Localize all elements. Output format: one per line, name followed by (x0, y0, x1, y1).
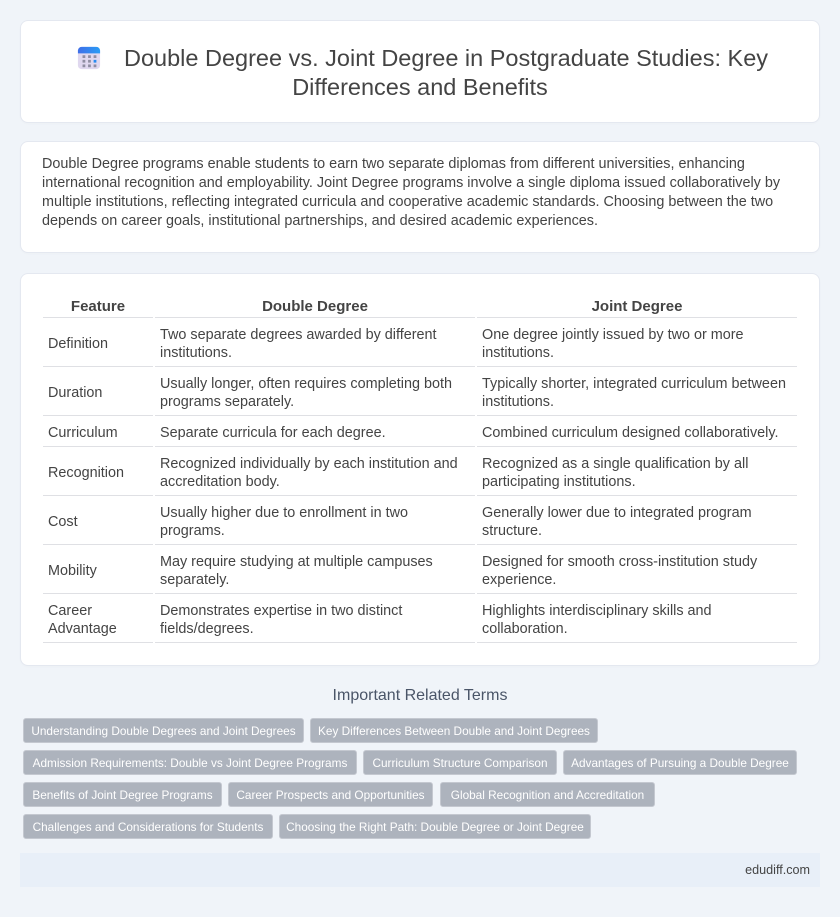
row: career advantage: fields/degrees. (160, 621, 254, 637)
tag (23, 782, 222, 807)
row: cost: programs. (160, 523, 225, 539)
title: Differences and Benefits (292, 74, 548, 100)
row: career advantage: Demonstrates expertise in two distinct (160, 603, 402, 619)
title: Double Degree vs. Joint Degree in Postgraduate Studies: Key (124, 45, 768, 71)
tag list (23, 718, 797, 839)
row: duration: Duration (48, 385, 102, 401)
tag: Career Prospects and Opportunities (236, 788, 425, 802)
tag (310, 718, 598, 743)
row: mobility: experience. (482, 572, 556, 588)
row: definition: Definition (48, 336, 108, 352)
tag (563, 750, 797, 775)
table header: Feature (71, 298, 125, 315)
row: curriculum (48, 425, 778, 441)
table header (71, 298, 682, 315)
tag: Key Differences Between Double and Joint Degrees (318, 724, 590, 738)
panel: comparison table (20, 273, 820, 666)
tag: Understanding Double Degrees and Joint Degrees (31, 724, 296, 738)
text block: introduction: Double Degree programs enable students to earn two separate diplomas from different universities, enhancing (42, 156, 745, 172)
footer (20, 853, 820, 887)
tag (440, 782, 655, 807)
row: curriculum: Combined curriculum designed collaboratively. (482, 425, 778, 441)
row: cost: Cost (48, 514, 78, 530)
row: curriculum: Separate curricula for each degree. (160, 425, 386, 441)
row: cost: structure. (482, 523, 542, 539)
row: duration: programs separately. (160, 394, 294, 410)
icon: calendar (78, 46, 100, 70)
tag: Curriculum Structure Comparison (372, 756, 548, 770)
row: cost (48, 505, 752, 539)
tag: Choosing the Right Path: Double Degree or Joint Degree (286, 820, 584, 834)
row: mobility: separately. (160, 572, 229, 588)
tag: Benefits of Joint Degree Programs (32, 788, 213, 802)
table header: Joint Degree (592, 298, 682, 315)
row: career advantage: collaboration. (482, 621, 568, 637)
tag (23, 814, 273, 839)
text block: introduction: depends on career goals, institutional partnerships, and desired academic experiences. (42, 213, 598, 229)
row: duration (48, 376, 786, 410)
row: duration: institutions. (482, 394, 554, 410)
text block: introduction: multiple institutions, reflecting integrated curricula and cooperative academic standards. Choosing between the two (42, 194, 773, 210)
row: recognition: participating institutions. (482, 474, 636, 490)
row: mobility: May require studying at multiple campuses (160, 554, 433, 570)
row: definition: institutions. (482, 345, 554, 361)
panel: introduction (20, 141, 820, 253)
row: career advantage: Advantage (48, 621, 117, 637)
row: curriculum: Curriculum (48, 425, 118, 441)
row: career advantage: Highlights interdisciplinary skills and (482, 603, 712, 619)
tag: Advantages of Pursuing a Double Degree (571, 756, 789, 770)
row: duration: Typically shorter, integrated curriculum between (482, 376, 786, 392)
tag: Admission Requirements: Double vs Joint Degree Programs (33, 756, 347, 770)
text block: introduction: international recognition and employability. Joint Degree programs involve a single diploma issued collaboratively by (42, 175, 780, 191)
row: definition: One degree jointly issued by two or more (482, 327, 744, 343)
row: definition: Two separate degrees awarded by different (160, 327, 437, 343)
row: definition (48, 327, 744, 361)
row: recognition: Recognized as a single qualification by all (482, 456, 748, 472)
tag (228, 782, 433, 807)
row: recognition: Recognized individually by each institution and (160, 456, 458, 472)
table header: Double Degree (262, 298, 368, 315)
row: mobility (48, 554, 758, 588)
row: cost: Usually higher due to enrollment in two (160, 505, 408, 521)
row: recognition: accreditation body. (160, 474, 280, 490)
row: duration: Usually longer, often requires completing both (160, 376, 452, 392)
tag: Global Recognition and Accreditation (451, 788, 644, 802)
row: mobility: Designed for smooth cross-institution study (482, 554, 757, 570)
tag (279, 814, 591, 839)
tag: Challenges and Considerations for Students (33, 820, 263, 834)
tag (23, 718, 304, 743)
text block: introduction (42, 156, 780, 229)
footer text: edudiff.com (745, 863, 810, 877)
panel: header (20, 20, 820, 123)
row: career advantage: Career (48, 603, 92, 619)
row: mobility: Mobility (48, 563, 97, 579)
row: recognition: Recognition (48, 465, 124, 481)
tag (363, 750, 557, 775)
row: recognition (48, 456, 748, 490)
tag (23, 750, 357, 775)
row: career advantage (48, 603, 712, 637)
row: definition: institutions. (160, 345, 232, 361)
heading: important related terms: Important Related Terms (333, 687, 507, 704)
row: cost: Generally lower due to integrated program (482, 505, 752, 521)
title (124, 45, 768, 100)
